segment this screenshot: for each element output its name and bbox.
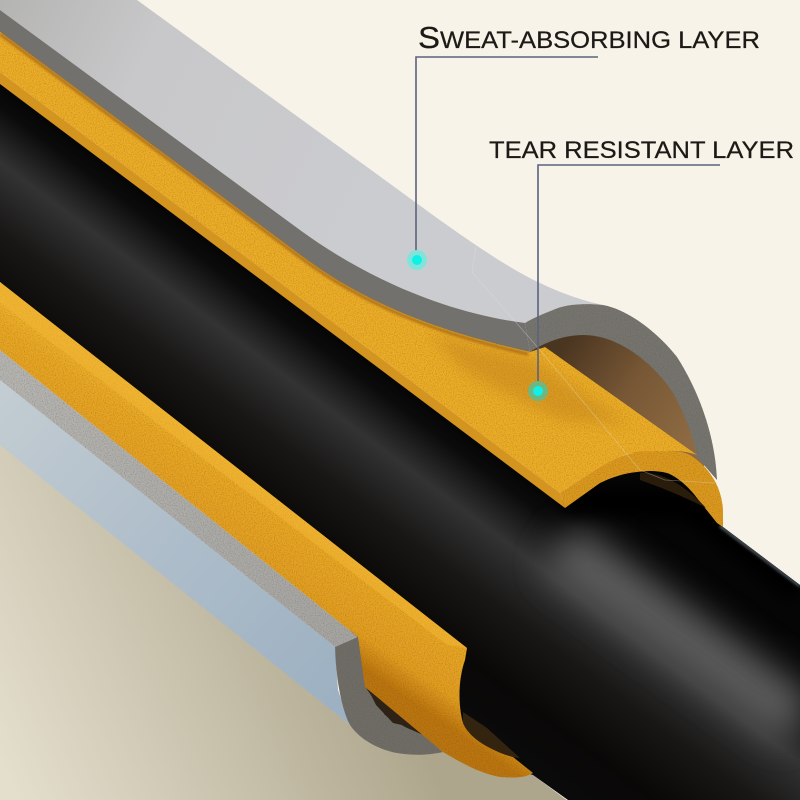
callout: sweat-absorbing layer [407,20,760,270]
leader line: tear resistant [538,165,720,384]
lower orange surface [0,282,533,778]
leader line: sweat-absorbing [416,57,598,252]
callout: tear resistant layer [489,137,794,401]
panel: upper tear resistant layer [0,32,723,527]
lower gray cut edge [0,350,358,647]
lower gray end ring [335,636,443,755]
panel: upper sweat-absorbing layer [0,0,717,480]
lower orange end interior shadow [463,712,520,758]
upper orange layer outer surface [0,32,697,493]
panel: lower sweat-absorbing layer [0,350,445,755]
lower interior shadow [362,680,445,752]
upper orange shaded patch under the gray lip [430,335,630,425]
ground shadow below the tube [0,440,580,800]
tube sheen and rim at the exposed end [560,500,800,720]
upper gray layer cut edge [0,10,530,352]
lower interior shadow over ring [366,688,430,738]
thin seam line across the upper layers [472,247,715,483]
upper orange dark edge along the gray layer [0,34,528,354]
lower blue-gray outer surface [0,380,350,725]
label: sweat-absorbing layer: SWEAT-ABSORBING LAYER [418,20,760,55]
panel: lower tear resistant layer [0,282,533,778]
upper gray layer end ring [525,304,717,480]
label: tear resistant layer: TEAR RESISTANT LAYER [489,137,794,164]
upper orange layer end ring [560,451,723,527]
upper layer interior shadow [530,324,705,480]
lower orange highlight bevel [0,282,467,648]
upper gray layer outer surface [0,0,603,323]
upper orange lower edge [0,72,565,508]
marker dot: sweat-absorbing [407,250,427,270]
marker dot: tear resistant [528,381,548,401]
upper orange ring inner shadow [640,473,706,508]
